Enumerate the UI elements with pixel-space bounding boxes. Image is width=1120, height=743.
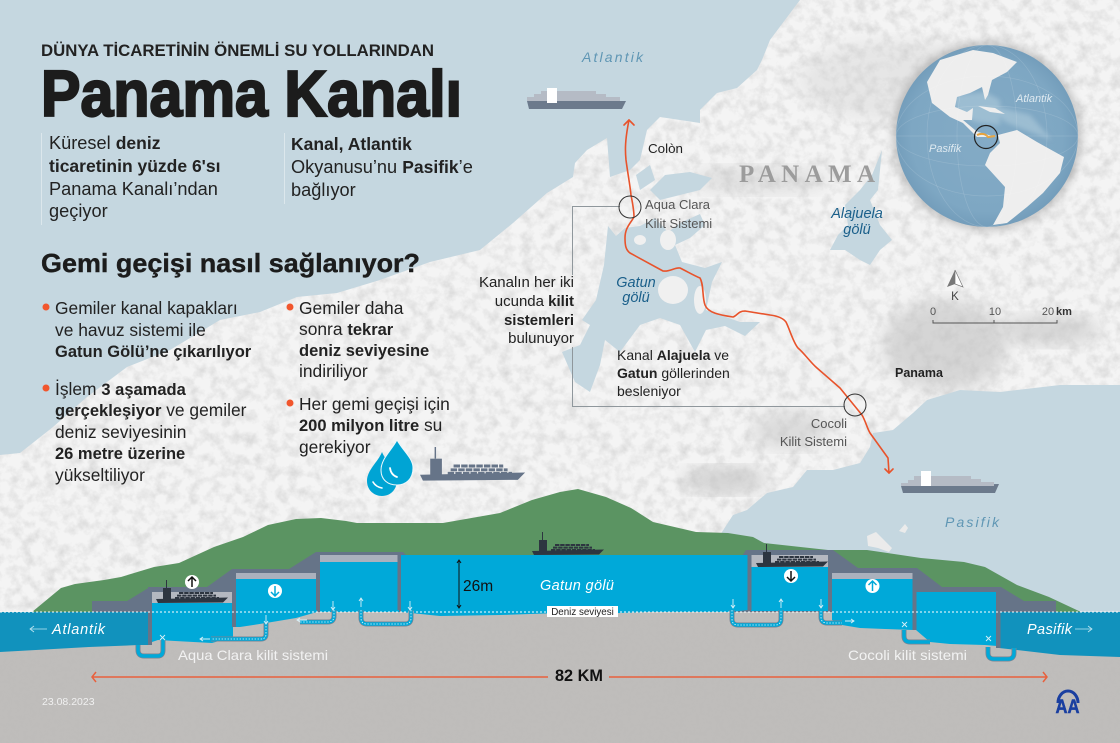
scale bar (930, 306, 1072, 323)
fact: world trade: Küresel deniz (49, 133, 160, 153)
cross-section: Gatun lake: Gatun gölü (540, 578, 614, 594)
bullet 4 (286, 394, 450, 457)
label: Aqua Clara lock: Aqua Clara (645, 197, 711, 212)
north arrow: K (951, 291, 959, 303)
bullet 4: 200 milyon litre su (299, 415, 442, 435)
26m height marker: 26m (463, 578, 493, 595)
cross-section: lock structures (92, 550, 1056, 612)
fact: connection: Okyanusu’nu Pasifik’e (291, 157, 473, 177)
subtitle: DÜNYA TİCARETİNİN ÖNEMLİ SU YOLLARINDAN (41, 41, 434, 60)
length arrow 82 km: 82 KM (555, 667, 603, 685)
bullet 2 (42, 379, 247, 485)
icon: water drops (367, 440, 413, 496)
bullet 3: Gemiler daha (299, 298, 404, 318)
label: PANAMA: PANAMA (739, 161, 875, 188)
canal route (624, 120, 893, 473)
fact: world trade: Panama Kanalı’ndan (49, 179, 218, 199)
bullet 3: sonra tekrar (299, 319, 393, 339)
bullet 1: Gatun Gölü’ne çıkarılıyor (55, 343, 252, 361)
fact: world trade: geçiyor (49, 201, 108, 221)
note: locks: bulunuyor (508, 330, 574, 347)
scale bar: 0 (930, 306, 936, 318)
cross-section: left lock chambers (148, 552, 402, 645)
label: Cocoli lock: Kilit Sistemi (780, 434, 847, 449)
label: Alajuela lake: Alajuela (830, 206, 883, 222)
label: Aqua Clara lock: Kilit Sistemi (645, 216, 712, 231)
cross-section: Pacific: Pasifik (1027, 622, 1073, 638)
sea level dotted line (0, 611, 1120, 613)
cross-section: green hills (32, 489, 1081, 612)
cross-section: Pacific (999, 612, 1120, 657)
locator globe (892, 41, 1082, 231)
map: Pacific islands (867, 524, 908, 552)
locator globe: Pasifik (929, 143, 962, 155)
note: locks: ucunda kilit (495, 293, 574, 310)
bullet 2: yükseltiliyor (55, 465, 145, 485)
cross-section: Gatun lake (401, 555, 748, 616)
map: Gatun lake (562, 165, 760, 392)
note: locks: Kanalın her iki (479, 274, 574, 291)
bullet 2: deniz seviyesinin (55, 422, 186, 442)
date: 23.08.2023 (42, 696, 95, 708)
label: Gatun lake: Gatun (616, 275, 656, 291)
container ship north (527, 88, 626, 109)
cross-section: Atlantic: Atlantik (51, 622, 106, 638)
bullet 3: indiriliyor (299, 361, 368, 381)
note: lakes: besleniyor (617, 383, 681, 399)
agency logo: AA (1056, 697, 1080, 718)
label: Gatun lake: gölü (622, 290, 650, 306)
fact: world trade (41, 133, 220, 225)
lock ship 1 (156, 580, 228, 603)
scale bar: 10 (989, 306, 1001, 318)
bullet 1: Gemiler kanal kapakları (55, 298, 238, 318)
label: Atlantik: Atlantik (581, 49, 644, 65)
cross-section: right lock chambers (748, 552, 1000, 648)
fact: connection: bağlıyor (291, 180, 356, 200)
scale bar: km (1056, 306, 1072, 318)
bullet 2: gerçekleşiyor ve gemiler (55, 400, 246, 420)
fact: connection (284, 133, 473, 204)
note: lakes: Kanal Alajuela ve (617, 347, 729, 363)
locator globe: Atlantik (1015, 93, 1053, 105)
callout connector lines (572, 206, 845, 406)
cross-section: ground (0, 612, 1120, 743)
scale bar: 20 (1042, 306, 1054, 318)
title: Panama Kanalı (41, 57, 462, 130)
bullet 3: deniz seviyesine (299, 342, 429, 360)
sea level label: Deniz seviyesi (551, 607, 614, 618)
label: Colòn: Colòn (648, 141, 683, 156)
label: Cocoli system: Cocoli kilit sistemi (848, 647, 967, 663)
icon: ship (420, 447, 525, 481)
label: Alajuela lake: gölü (843, 222, 871, 238)
fact: world trade: ticaretinin yüzde 6'sı (49, 156, 220, 176)
bullet 4: gerekiyor (299, 437, 371, 457)
bullet 1: ve havuz sistemi ile (55, 320, 206, 340)
26m height marker (457, 560, 493, 608)
label: Panama city: Panama (895, 366, 944, 380)
bullet 4: Her gemi geçişi için (299, 394, 450, 414)
lake ship (532, 532, 604, 555)
level icons (185, 569, 880, 598)
bullet 3 (286, 298, 429, 381)
label: Pasifik: Pasifik (945, 514, 1000, 530)
note: locks: sistemleri (504, 312, 574, 329)
container ship south (901, 471, 999, 493)
flow arrows (160, 598, 991, 641)
label: Cocoli lock: Cocoli (811, 416, 847, 431)
heading: how it works: Gemi geçişi nasıl sağlanıyor? (41, 248, 420, 278)
bullet 2: 26 metre üzerine (55, 445, 185, 463)
map: Alajuela lake (830, 150, 892, 265)
label: Aqua Clara system: Aqua Clara kilit sistemi (178, 647, 328, 663)
culvert pipes (138, 610, 1014, 659)
note: lakes: Gatun göllerinden (617, 365, 730, 381)
bullet 2: İşlem 3 aşamada (55, 379, 186, 399)
cross-section: Atlantic (0, 612, 148, 652)
north arrow (947, 270, 963, 303)
bullet 1 (42, 298, 252, 361)
lock ship 2 (756, 544, 828, 567)
lock markers (619, 196, 866, 416)
fact: connection: Kanal, Atlantik (291, 134, 412, 154)
length arrow 82 km (92, 667, 1047, 685)
